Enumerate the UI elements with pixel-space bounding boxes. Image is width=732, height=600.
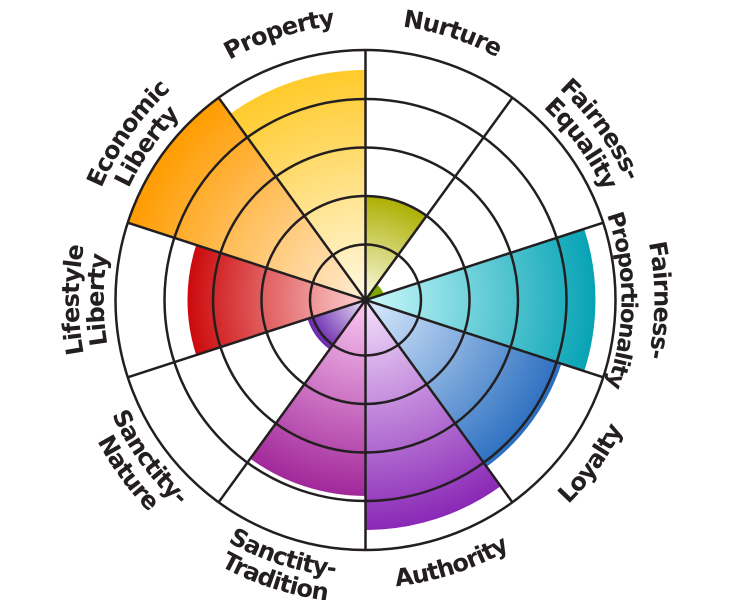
- wedge: Sanctity-Tradition: [250, 300, 366, 496]
- label: Fairness-Proportionality: Proportionality: [604, 212, 639, 390]
- wedge: Economic Liberty: [128, 98, 366, 300]
- label: Sanctity-Nature: Nature: [98, 434, 156, 510]
- label: Lifestyle Liberty: Lifestyle: [61, 245, 85, 354]
- wedge: Fairness-Equality: [366, 285, 384, 300]
- label: Fairness-Proportionality: Fairness-: [649, 242, 672, 358]
- label: Economic Liberty: Economic: [86, 81, 170, 186]
- wedge: Sanctity-Nature: [308, 300, 366, 349]
- grid rings and spokes: [116, 50, 616, 550]
- wedge: Loyalty: [366, 300, 561, 467]
- label: Nurture: Nurture: [404, 10, 500, 56]
- label: Sanctity-Tradition: Sanctity-: [230, 528, 336, 579]
- wedge: Fairness-Proportionality: [366, 229, 595, 371]
- label: Authority: Authority: [396, 538, 506, 586]
- label: Property: Property: [223, 12, 334, 59]
- label: Economic Liberty: Liberty: [114, 106, 178, 186]
- label: Fairness-Equality: Fairness-: [560, 78, 634, 178]
- label: Sanctity-Nature: Sanctity-: [114, 410, 184, 502]
- label: Sanctity-Tradition: [226, 528, 336, 600]
- wedge: Lifestyle Liberty: [187, 245, 366, 355]
- wedge: Property: [230, 70, 366, 300]
- label: Lifestyle Liberty: Liberty: [86, 253, 112, 345]
- label: Loyalty: Loyalty: [557, 423, 623, 503]
- label: Lifestyle Liberty: [61, 245, 112, 354]
- wedge: Authority: [366, 300, 501, 530]
- label: Fairness-Equality: Equality: [544, 96, 616, 186]
- wedge: Nurture: [366, 195, 427, 300]
- label: Fairness-Proportionality: [604, 212, 672, 390]
